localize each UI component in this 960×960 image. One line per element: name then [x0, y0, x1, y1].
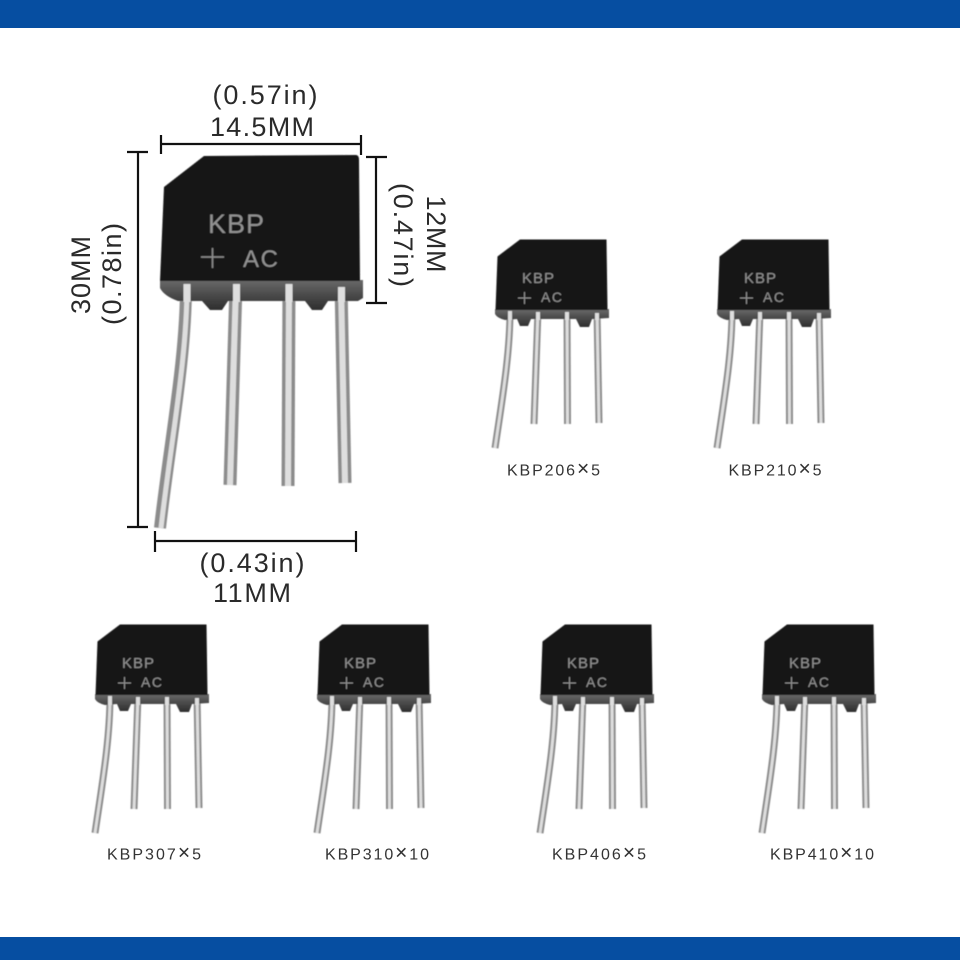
component KBP410 photo [762, 624, 876, 833]
dimension: top width 14.5MM: 14.5MM [210, 112, 314, 142]
component KBP310 photo: AC [363, 674, 384, 690]
label KBP406: KBP406×5 [552, 842, 646, 864]
top blue band [0, 0, 960, 28]
component KBP406 photo: AC [586, 674, 607, 690]
component KBP206 photo [495, 240, 609, 448]
label KBP210: KBP210×5 [728, 458, 822, 480]
component KBP307 photo: AC [141, 674, 162, 690]
large component photo: KBP bridge rectifier [160, 155, 363, 528]
component KBP206 photo: KBP [522, 270, 554, 287]
dimension: lead width 11MM [155, 531, 356, 608]
component KBP310 photo [317, 624, 431, 833]
component KBP210 photo: KBP [744, 270, 776, 287]
bottom blue band [0, 937, 960, 960]
body marking: KBP [208, 209, 264, 239]
component KBP410 photo: KBP [789, 655, 821, 672]
dimension: top width 14.5MM [161, 80, 361, 155]
dimension: total height 30MM: 30MM [66, 236, 96, 314]
dimension: lead width 11MM: 11MM [213, 578, 291, 608]
component KBP406 photo: KBP [567, 655, 599, 672]
component KBP206 photo: AC [541, 289, 562, 305]
component KBP307 photo: KBP [122, 655, 154, 672]
component KBP210 photo [717, 240, 831, 448]
component KBP310 photo: KBP [344, 655, 376, 672]
label KBP206: KBP206×5 [507, 458, 600, 480]
label KBP307: KBP307×5 [107, 842, 201, 864]
component KBP406 photo [540, 624, 654, 833]
component KBP410 photo: AC [808, 674, 829, 690]
label KBP410: KBP410×10 [770, 842, 874, 864]
dimension: body height 12MM: (0.47in) [388, 183, 418, 287]
dimension: body height 12MM [366, 157, 451, 303]
large component photo: KBP bridge rectifier: AC [243, 246, 278, 273]
dimension: total height 30MM: (0.78in) [97, 223, 127, 325]
dimension: top width 14.5MM: (0.57in) [212, 80, 318, 110]
dimension: body height 12MM: 12MM [421, 196, 451, 272]
dimension: lead width 11MM: (0.43in) [200, 548, 304, 578]
component KBP210 photo: AC [763, 289, 784, 305]
label KBP310: KBP310×10 [325, 842, 429, 864]
component KBP307 photo [95, 624, 209, 833]
dimension: total height 30MM [66, 152, 148, 527]
